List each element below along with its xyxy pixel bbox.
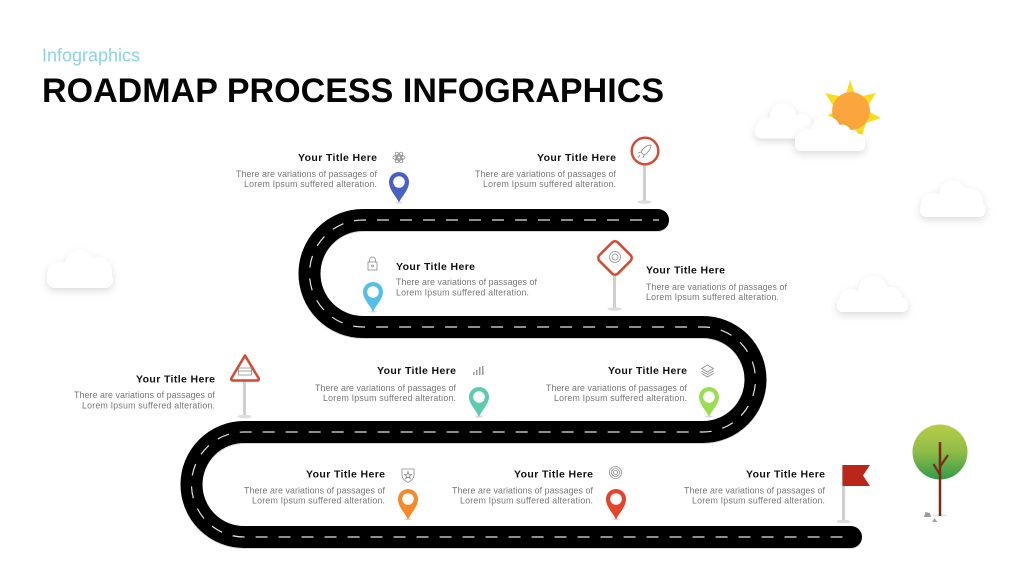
cloud: left bbox=[47, 250, 113, 288]
step 6 text: Lorem Ipsum suffered alteration. bbox=[323, 393, 456, 403]
step 9 text: Your Title Here bbox=[514, 468, 593, 480]
icon: sun bbox=[825, 80, 881, 138]
pin: light blue bbox=[363, 282, 383, 312]
step 4 text: Lorem Ipsum suffered alteration. bbox=[646, 292, 779, 302]
step 7 text bbox=[546, 365, 688, 403]
step 1 text: Lorem Ipsum suffered alteration. bbox=[244, 179, 377, 189]
sign: diamond with gear bbox=[597, 240, 633, 311]
pin: orange bbox=[398, 489, 418, 520]
step 8 text bbox=[244, 468, 386, 506]
step 9 text: There are variations of passages of bbox=[452, 486, 594, 496]
icon: bar chart bbox=[473, 366, 484, 375]
step 4 text bbox=[646, 264, 788, 302]
icon: target bbox=[610, 466, 622, 478]
icon: atom bbox=[393, 151, 405, 164]
step 10 text: Your Title Here bbox=[746, 468, 825, 480]
icon: shield star bbox=[402, 469, 414, 482]
step 5 text: There are variations of passages of bbox=[74, 390, 216, 400]
step 3 text: Your Title Here bbox=[396, 261, 475, 273]
pin: red bbox=[606, 489, 626, 520]
step 2 text: There are variations of passages of bbox=[475, 169, 617, 179]
step 10 text: There are variations of passages of bbox=[684, 486, 826, 496]
icon: finish flag bbox=[836, 465, 870, 523]
cloud: front top bbox=[795, 116, 865, 151]
step 7 text: Your Title Here bbox=[608, 365, 687, 377]
step 10 text: Lorem Ipsum suffered alteration. bbox=[692, 496, 825, 506]
step 5 text bbox=[74, 374, 216, 410]
step 7 text: There are variations of passages of bbox=[546, 383, 688, 393]
step 4 text: There are variations of passages of bbox=[646, 282, 788, 292]
icon: layers bbox=[702, 365, 714, 377]
step 10 text bbox=[684, 468, 826, 506]
step 1 text bbox=[236, 152, 378, 189]
sign: triangle with briefcase bbox=[231, 356, 259, 418]
step 3 text bbox=[396, 261, 538, 298]
step 2 text: Your Title Here bbox=[537, 152, 616, 164]
step 6 text bbox=[315, 365, 457, 403]
step 5 text: Lorem Ipsum suffered alteration. bbox=[82, 400, 215, 410]
step 2 text bbox=[475, 152, 617, 189]
pin: teal bbox=[469, 387, 489, 418]
step 1 text: There are variations of passages of bbox=[236, 169, 378, 179]
cloud: back top bbox=[755, 103, 812, 138]
step 8 text: There are variations of passages of bbox=[244, 486, 386, 496]
step 3 text: There are variations of passages of bbox=[396, 277, 538, 287]
step 3 text: Lorem Ipsum suffered alteration. bbox=[396, 288, 529, 298]
step 9 text: Lorem Ipsum suffered alteration. bbox=[460, 496, 593, 506]
cloud: middle right bbox=[837, 276, 908, 312]
step 1 text: Your Title Here bbox=[298, 152, 377, 164]
step 5 text: Your Title Here bbox=[136, 374, 215, 386]
cloud: right bbox=[920, 180, 986, 217]
step 6 text: There are variations of passages of bbox=[315, 383, 457, 393]
step 9 text bbox=[452, 468, 594, 506]
pin: blue bbox=[389, 172, 409, 204]
icon: lock bbox=[368, 257, 377, 270]
subtitle: Infographics bbox=[42, 46, 140, 66]
road bbox=[192, 220, 851, 538]
step 8 text: Your Title Here bbox=[306, 468, 385, 480]
sign: round with rocket bbox=[632, 138, 658, 204]
step 2 text: Lorem Ipsum suffered alteration. bbox=[483, 179, 616, 189]
tree bbox=[912, 424, 968, 522]
step 4 text: Your Title Here bbox=[646, 264, 725, 276]
step 8 text: Lorem Ipsum suffered alteration. bbox=[252, 496, 385, 506]
step 7 text: Lorem Ipsum suffered alteration. bbox=[554, 393, 687, 403]
step 6 text: Your Title Here bbox=[377, 365, 456, 377]
title: ROADMAP PROCESS INFOGRAPHICS bbox=[42, 72, 664, 110]
pin: lime bbox=[699, 387, 719, 418]
